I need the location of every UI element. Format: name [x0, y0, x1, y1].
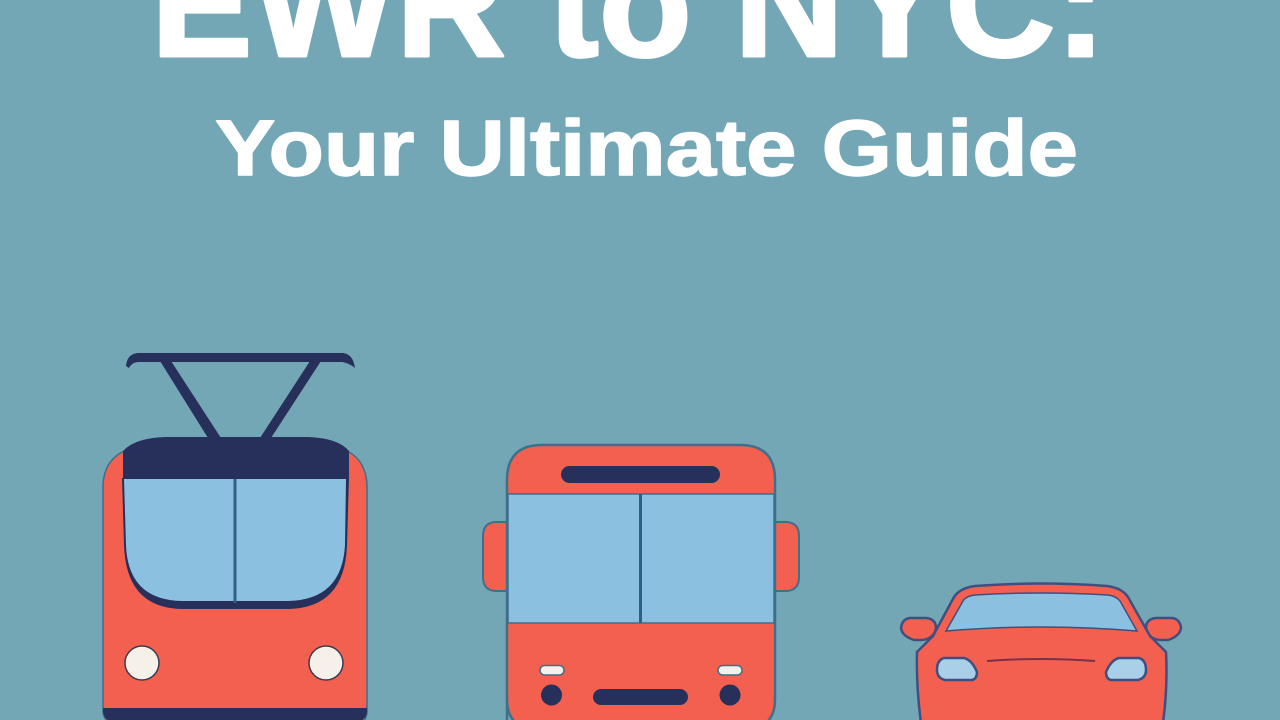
train headlights: [125, 646, 343, 680]
icon: bus: [483, 445, 799, 720]
bus lights: [540, 666, 742, 675]
bus body: [507, 445, 775, 720]
bus lower lamps: [541, 684, 740, 706]
car mirrors: [901, 618, 1181, 640]
train body: [103, 452, 367, 720]
icon: car: [901, 584, 1181, 720]
train window divider: [234, 479, 236, 603]
bus mirrors: [483, 522, 799, 591]
icon: train: [103, 353, 367, 720]
subtitle: Your Ultimate Guide: [215, 103, 1078, 192]
bus windshield: [508, 494, 774, 623]
train pantograph: [126, 353, 355, 438]
bus destination sign: [561, 466, 720, 483]
car hood line: [987, 659, 1095, 661]
train roof: [123, 437, 349, 479]
train bottom band: [103, 708, 367, 720]
train windshield: [124, 479, 346, 601]
car body: [917, 584, 1166, 720]
bus grille: [593, 689, 688, 705]
bus window divider: [639, 494, 642, 623]
train windshield outline: [122, 478, 349, 609]
car headlights: [937, 658, 1146, 680]
car windshield: [946, 593, 1137, 631]
